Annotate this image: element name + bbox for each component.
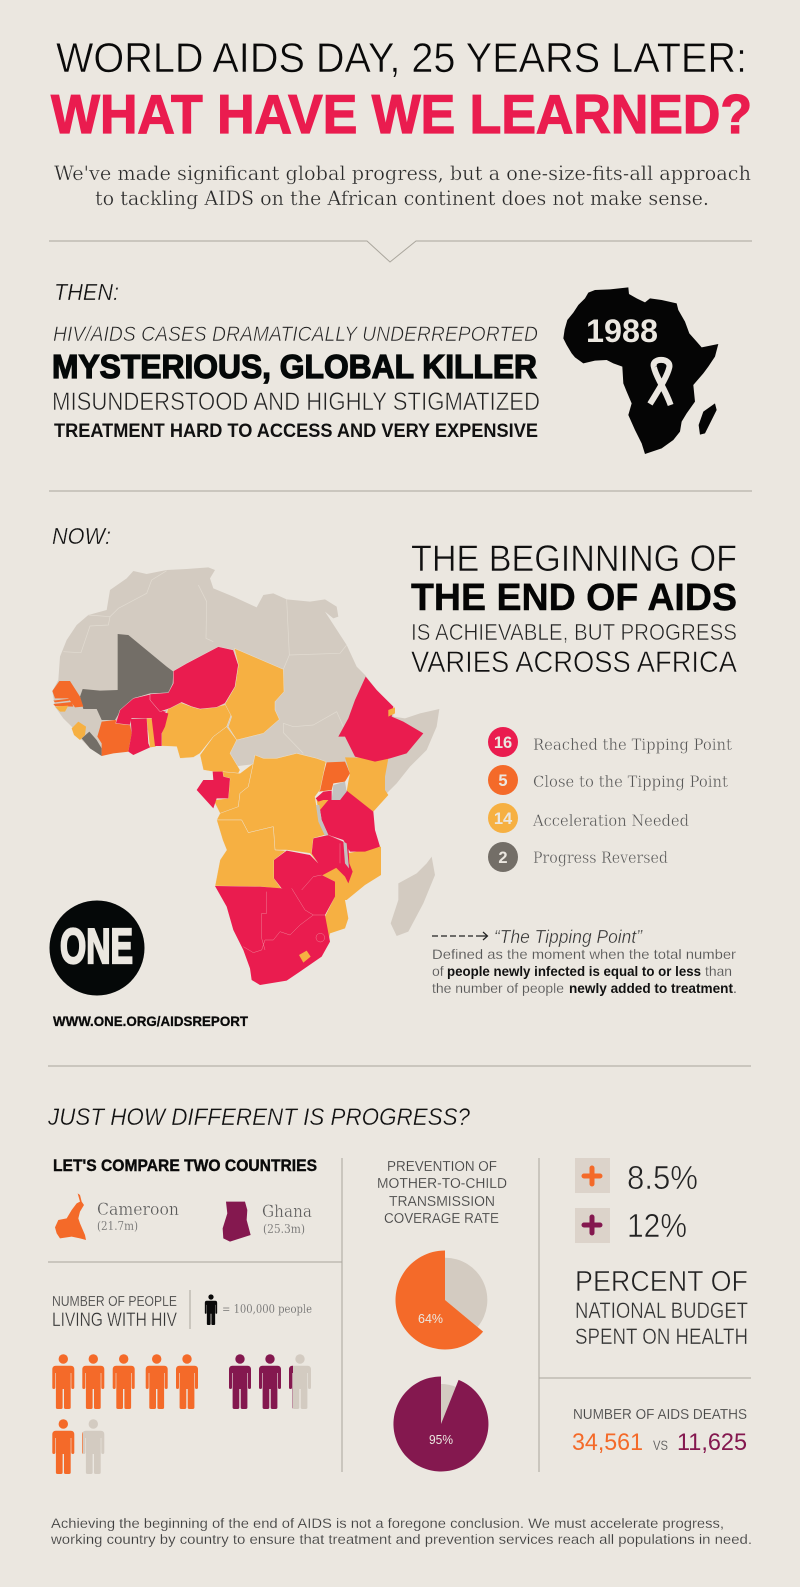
label: percent of national budget: NATIONAL BUDGET (575, 1298, 748, 1323)
legend item: reversed: 2 (498, 849, 508, 867)
title: WORLD AIDS DAY, 25 YEARS LATER: (56, 34, 747, 81)
callout: the tipping point (432, 927, 737, 996)
intro text: to tackling AIDS on the African continent does not make sense. (95, 187, 709, 210)
pie: cameroon 64 percent: 64% (418, 1311, 443, 1326)
callout: the tipping point: “The Tipping Point” (494, 927, 643, 947)
heading: the beginning of the end of aids: THE BEGINNING OF (411, 538, 737, 579)
legend item: acceleration: Acceleration Needed (532, 812, 689, 830)
heading: prevention: COVERAGE RATE (384, 1210, 499, 1227)
logo: one (50, 900, 144, 996)
stat: cameroon 8.5 percent (575, 1158, 698, 1196)
heading: living with hiv: LIVING WITH HIV (52, 1310, 177, 1331)
region: acceleration needed (55, 648, 388, 942)
label: percent of national budget: SPENT ON HEALTH (575, 1324, 748, 1349)
lakes (316, 782, 349, 868)
map: africa progress (52, 567, 439, 985)
legend item: reached (488, 727, 733, 757)
pictogram: ghana people (229, 1354, 311, 1409)
callout: the tipping point: newly added to treatment (569, 980, 733, 996)
region: unmarked countries (52, 567, 439, 936)
legend item: reversed (488, 842, 668, 872)
stat: aids deaths: VS (653, 1437, 668, 1453)
footer text: working country by country to ensure that treatment and prevention services reach all populations in need. (50, 1532, 752, 1547)
stat: ghana 12 percent: 12% (627, 1207, 687, 1244)
logo: one: ONE (60, 920, 133, 974)
stat: aids deaths: NUMBER OF AIDS DEATHS (573, 1406, 747, 1423)
heading: now: NOW: (52, 523, 111, 549)
country: cameroon: Cameroon (97, 1200, 179, 1220)
callout: the tipping point: . (733, 980, 737, 996)
heading: the beginning of the end of aids: VARIES ACROSS AFRICA (411, 646, 737, 679)
title (51, 34, 752, 145)
stat: cameroon 8.5 percent: 8.5% (627, 1159, 698, 1196)
legend (488, 727, 733, 872)
country: ghana (223, 1202, 312, 1242)
legend item: acceleration: 14 (494, 810, 513, 828)
legend item: close (488, 765, 729, 795)
label: percent of national budget: PERCENT OF (575, 1266, 748, 1298)
legend item: reached: 16 (494, 734, 512, 752)
pie: ghana 95 percent (393, 1376, 488, 1472)
icon: black africa 1988: 1988 (586, 313, 658, 349)
callout: the tipping point: the number of people (432, 980, 564, 996)
country: ghana: (25.3m) (263, 1221, 305, 1236)
pie: cameroon 64 percent (395, 1250, 487, 1350)
heading: the beginning of the end of aids: THE END OF AIDS (411, 577, 737, 619)
region: close to the tipping point (52, 681, 350, 792)
legend item: acceleration (488, 803, 689, 833)
callout: the tipping point: Defined as the moment when the total number (432, 946, 736, 962)
icon: black africa 1988 (563, 287, 718, 454)
legend item: close: Close to the Tipping Point (533, 773, 729, 791)
then statements (52, 323, 540, 442)
panel: prevention coverage (377, 1158, 507, 1472)
intro text (54, 162, 751, 210)
label: percent of national budget (575, 1266, 748, 1349)
title: WHAT HAVE WE LEARNED? (51, 83, 752, 145)
callout: the tipping point: of (432, 963, 444, 979)
legend item: reached: Reached the Tipping Point (533, 736, 733, 754)
heading: just how different: JUST HOW DIFFERENT IS PROGRESS? (47, 1104, 471, 1131)
country: cameroon (55, 1193, 179, 1240)
heading: prevention: PREVENTION OF (387, 1158, 497, 1175)
country: ghana: Ghana (262, 1202, 312, 1222)
legend item: close: 5 (498, 772, 508, 790)
then statements: MYSTERIOUS, GLOBAL KILLER (52, 349, 537, 386)
link: report url: WWW.ONE.ORG/AIDSREPORT (53, 1014, 249, 1029)
then statements: MISUNDERSTOOD AND HIGHLY STIGMATIZED (52, 388, 540, 416)
pictogram: cameroon people (52, 1354, 198, 1474)
legend item: reversed: Progress Reversed (533, 849, 668, 867)
heading: living with hiv: NUMBER OF PEOPLE (52, 1294, 177, 1310)
stat: ghana 12 percent (575, 1207, 687, 1244)
heading: the beginning of the end of aids: IS ACHIEVABLE, BUT PROGRESS (411, 619, 737, 645)
heading: compare: LET'S COMPARE TWO COUNTRIES (53, 1156, 317, 1175)
callout: the tipping point: people newly infected is equal to or less (447, 963, 701, 979)
callout: the tipping point: than (705, 963, 732, 979)
heading: prevention (377, 1158, 507, 1227)
heading: prevention: TRANSMISSION (389, 1193, 495, 1210)
footer text (50, 1516, 752, 1547)
footer text: Achieving the beginning of the end of AIDS is not a foregone conclusion. We must accelerate progress, (51, 1516, 724, 1531)
panel: budget spent on health (572, 1158, 748, 1456)
heading: then: THEN: (54, 279, 119, 305)
key: person scale (205, 1294, 312, 1325)
country: cameroon: (21.7m) (97, 1218, 138, 1233)
stat: aids deaths: 34,561 (572, 1429, 643, 1456)
panel: compare countries (52, 1156, 317, 1474)
region: progress reversed (80, 634, 173, 756)
then statements: HIV/AIDS CASES DRAMATICALLY UNDERREPORTED (53, 323, 538, 346)
region: reached the tipping point (116, 647, 423, 985)
pie: ghana 95 percent: 95% (429, 1432, 453, 1447)
intro text: We've made significant global progress, but a one-size-fits-all approach (54, 162, 751, 185)
stat: aids deaths: 11,625 (677, 1429, 747, 1456)
heading: the beginning of the end of aids (411, 538, 737, 679)
stat: aids deaths (572, 1406, 747, 1456)
heading: prevention: MOTHER-TO-CHILD (377, 1175, 507, 1192)
key: person scale: = 100,000 people (222, 1302, 312, 1316)
heading: living with hiv (52, 1294, 177, 1331)
panel: then (52, 279, 718, 454)
then statements: TREATMENT HARD TO ACCESS AND VERY EXPENSIVE (54, 421, 538, 442)
